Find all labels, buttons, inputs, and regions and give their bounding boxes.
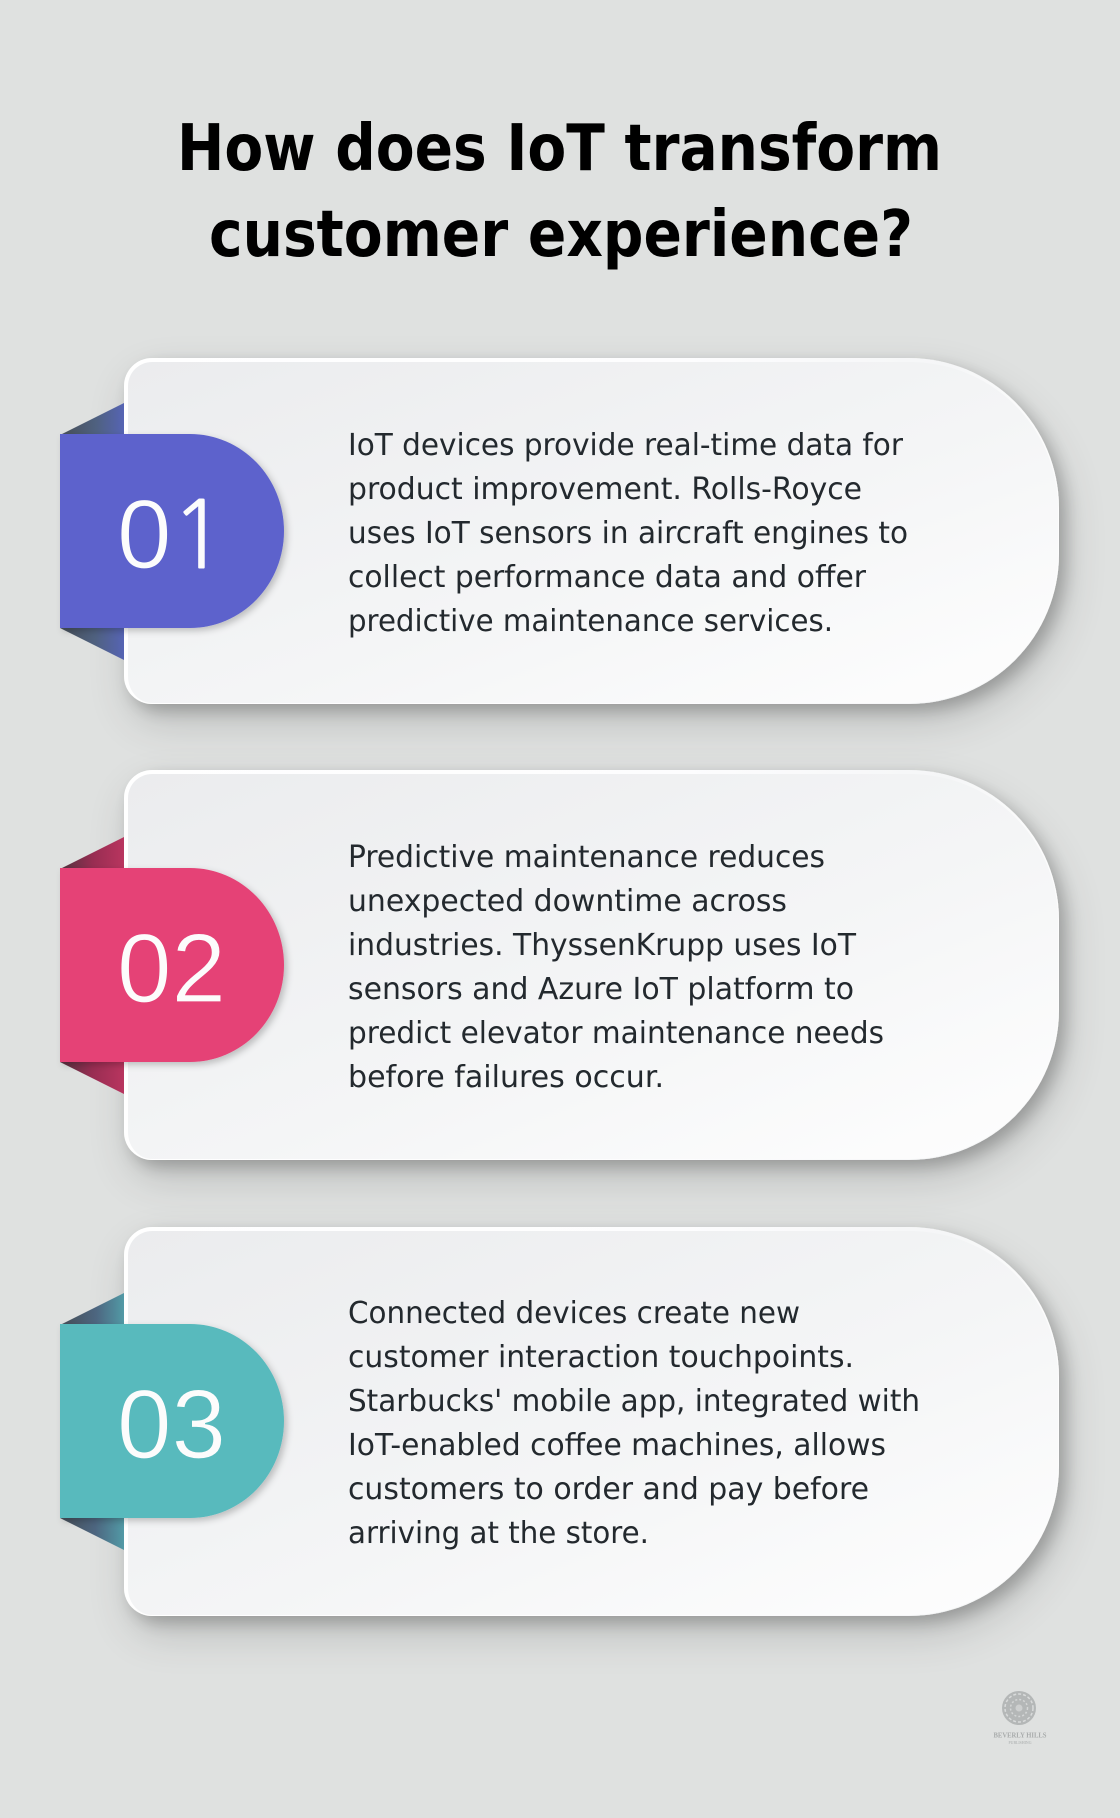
description: industries. ThyssenKrupp uses IoT (348, 928, 857, 963)
description (348, 840, 884, 1095)
number: 02 (117, 913, 226, 1023)
card background (124, 1227, 1059, 1616)
description: sensors and Azure IoT platform to (348, 972, 854, 1007)
description (348, 1296, 920, 1551)
number badge (60, 868, 284, 1062)
title: How does IoT transform (177, 112, 942, 186)
description: Starbucks' mobile app, integrated with (348, 1384, 920, 1419)
description: IoT devices provide real-time data for (348, 428, 904, 463)
description: uses IoT sensors in aircraft engines to (348, 516, 908, 551)
title: customer experience? (209, 198, 913, 272)
number: 0 (117, 479, 172, 589)
title (177, 112, 942, 272)
description: customer interaction touchpoints. (348, 1340, 854, 1375)
description: unexpected downtime across (348, 884, 787, 919)
description: Predictive maintenance reduces (348, 840, 825, 875)
number badge (60, 1324, 284, 1518)
panel: step 03 (60, 1227, 1059, 1616)
card background (124, 770, 1059, 1160)
logo text: BEVERLY HILLS (994, 1730, 1046, 1740)
panel: step 02 (60, 770, 1059, 1160)
ribbon folds (60, 1293, 124, 1550)
description: collect performance data and offer (348, 560, 867, 595)
logo text (994, 1730, 1046, 1745)
description: predict elevator maintenance needs (348, 1016, 884, 1051)
number: 03 (117, 1369, 226, 1479)
icon: ornamental medallion (1002, 1691, 1036, 1725)
ribbon folds (60, 837, 124, 1094)
description: predictive maintenance services. (348, 604, 833, 639)
description: IoT-enabled coffee machines, allows (348, 1428, 886, 1463)
description (348, 428, 908, 639)
panel: step 01 (60, 358, 1059, 704)
number: 1 (170, 488, 227, 582)
description: customers to order and pay before (348, 1472, 869, 1507)
description: arriving at the store. (348, 1516, 649, 1551)
ribbon folds (60, 403, 124, 660)
logo text: PUBLISHING (1008, 1740, 1032, 1745)
card background (124, 358, 1059, 704)
description: before failures occur. (348, 1060, 664, 1095)
logo: Beverly Hills Publishing (994, 1691, 1046, 1745)
number badge (60, 434, 284, 628)
description: Connected devices create new (348, 1296, 800, 1331)
description: product improvement. Rolls-Royce (348, 472, 862, 507)
